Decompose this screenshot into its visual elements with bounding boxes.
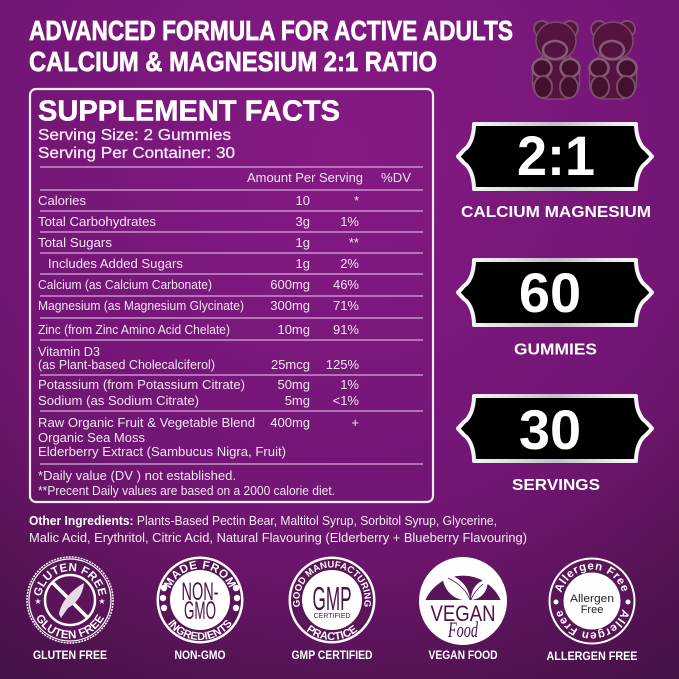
nutrition table: 10mg [277,322,310,337]
nutrition table: 3g [296,214,310,229]
nutrition table: (as Plant-based Cholecalciferol) [38,357,215,372]
nutrition table: Includes Added Sugars [48,256,183,271]
badge: non-gmo: INGREDIENTS [168,619,232,640]
nutrition table: 125% [326,357,359,372]
icon: gummy bears [532,21,636,99]
title: CALCIUM & MAGNESIUM 2:1 RATIO [29,46,437,77]
badge: gmp certified: PRACTICE [306,624,358,640]
nutrition table: Organic Sea Moss [38,430,145,445]
nutrition table: Elderberry Extract (Sambucus Nigra, Fruit) [38,444,286,459]
nutrition table: 25mcg [271,357,310,372]
badge: non-gmo [156,556,244,644]
badge: gluten free: GLUTEN FREE [34,563,106,596]
badge: non-gmo: MADE FROM [164,560,236,588]
panel: supplement facts [30,89,433,502]
nutrition table: <1% [333,393,359,408]
badge: allergen free [548,558,636,644]
footnotes [38,468,335,498]
badge: gluten free: GLUTEN FREE [37,614,104,639]
badge: gluten free: ★ [34,597,42,606]
nutrition table: Raw Organic Fruit & Vegetable Blend [38,415,255,430]
badge: gmp certified: CERTIFIED [314,613,350,620]
nutrition table: Calcium (as Calcium Carbonate) [38,277,212,292]
nutrition table: %DV [381,170,411,185]
stat: 2:1 calcium magnesium: 2:1 [517,124,595,187]
badge: non-gmo: GMO [184,597,216,625]
footnotes: *Daily value (DV ) not established. [38,468,236,483]
nutrition table: Sodium (as Sodium Citrate) [38,393,199,408]
stat: 30 servings: 30 [519,398,581,461]
stat: 30 servings: SERVINGS [512,477,600,494]
badge: allergen free: Allergen Free [555,563,628,593]
badge: allergen free: Allergen [570,593,614,605]
other ingredients text: Other Ingredients: Plants-Based Pectin Bear, Maltitol Syrup, Sorbitol Syrup, Glycerine, [29,514,497,528]
badge: gmp certified: GMP [312,580,352,617]
stat: 60 gummies: 60 [519,261,581,324]
nutrition table: Zinc (from Zinc Amino Acid Chelate) [38,322,230,337]
other ingredients text [29,514,527,545]
footnotes: **Precent Daily values are based on a 2000 calorie diet. [38,483,335,498]
badge: allergen free: Allergen Free [556,609,629,639]
nutrition table: 5mg [285,393,310,408]
badge: vegan food: Food [447,617,479,642]
badge: vegan food [419,557,507,645]
serving information: Serving Per Container: 30 [38,145,235,162]
stat: 2:1 calcium magnesium: CALCIUM MAGNESIUM [461,204,651,221]
stat: 60 gummies [458,260,652,358]
nutrition table: ** [349,235,359,250]
nutrition table: + [351,415,359,430]
badge captions [33,648,638,663]
nutrition table: Amount Per Serving [247,170,363,185]
nutrition table: 400mg [270,415,310,430]
nutrition table: 91% [333,322,359,337]
badge: gluten free: ★ [98,597,106,606]
nutrition table: 1% [340,377,359,392]
nutrition table: 2% [340,256,359,271]
nutrition table: Total Carbohydrates [38,214,157,229]
nutrition table: Calories [38,193,86,208]
badge captions: VEGAN FOOD [428,648,498,662]
nutrition table [38,167,423,464]
badge: non-gmo: NON- [182,578,218,606]
nutrition table: 46% [333,277,359,292]
nutrition table: 1g [296,235,310,250]
stat: 2:1 calcium magnesium [458,124,652,221]
other ingredients text: Malic Acid, Erythritol, Citric Acid, Natural Flavouring (Elderberry + Blueberry Flavouring) [29,531,527,545]
title [29,15,513,77]
badge: gmp certified: GOOD MANUFACTURING [293,560,372,607]
heading: supplement facts: SUPPLEMENT FACTS [38,96,340,128]
badge: gmp certified [288,556,376,644]
serving information: Serving Size: 2 Gummies [38,127,231,144]
badge captions: GLUTEN FREE [33,648,107,662]
badge captions: NON-GMO [174,648,226,662]
nutrition table: 1% [340,214,359,229]
badge captions: ALLERGEN FREE [546,649,638,663]
nutrition table: 10 [296,193,310,208]
badge captions: GMP CERTIFIED [292,648,373,662]
nutrition table: Vitamin D3 [38,344,100,359]
nutrition table: 600mg [270,277,310,292]
nutrition table: 300mg [270,298,310,313]
nutrition table: * [354,193,359,208]
nutrition table: Total Sugars [38,235,113,250]
nutrition table: 71% [333,298,359,313]
nutrition table: 50mg [277,377,310,392]
badge: allergen free: Free [581,604,603,616]
nutrition table: Magnesium (as Magnesium Glycinate) [38,298,244,313]
title: ADVANCED FORMULA FOR ACTIVE ADULTS [29,15,513,46]
badge: vegan food: VEGAN [430,601,496,626]
nutrition table: 1g [296,256,310,271]
nutrition table: Potassium (from Potassium Citrate) [38,377,245,392]
stat: 60 gummies: GUMMIES [514,342,597,358]
badge: gluten free [26,556,114,644]
serving information [38,127,235,162]
stat: 30 servings [458,396,652,494]
